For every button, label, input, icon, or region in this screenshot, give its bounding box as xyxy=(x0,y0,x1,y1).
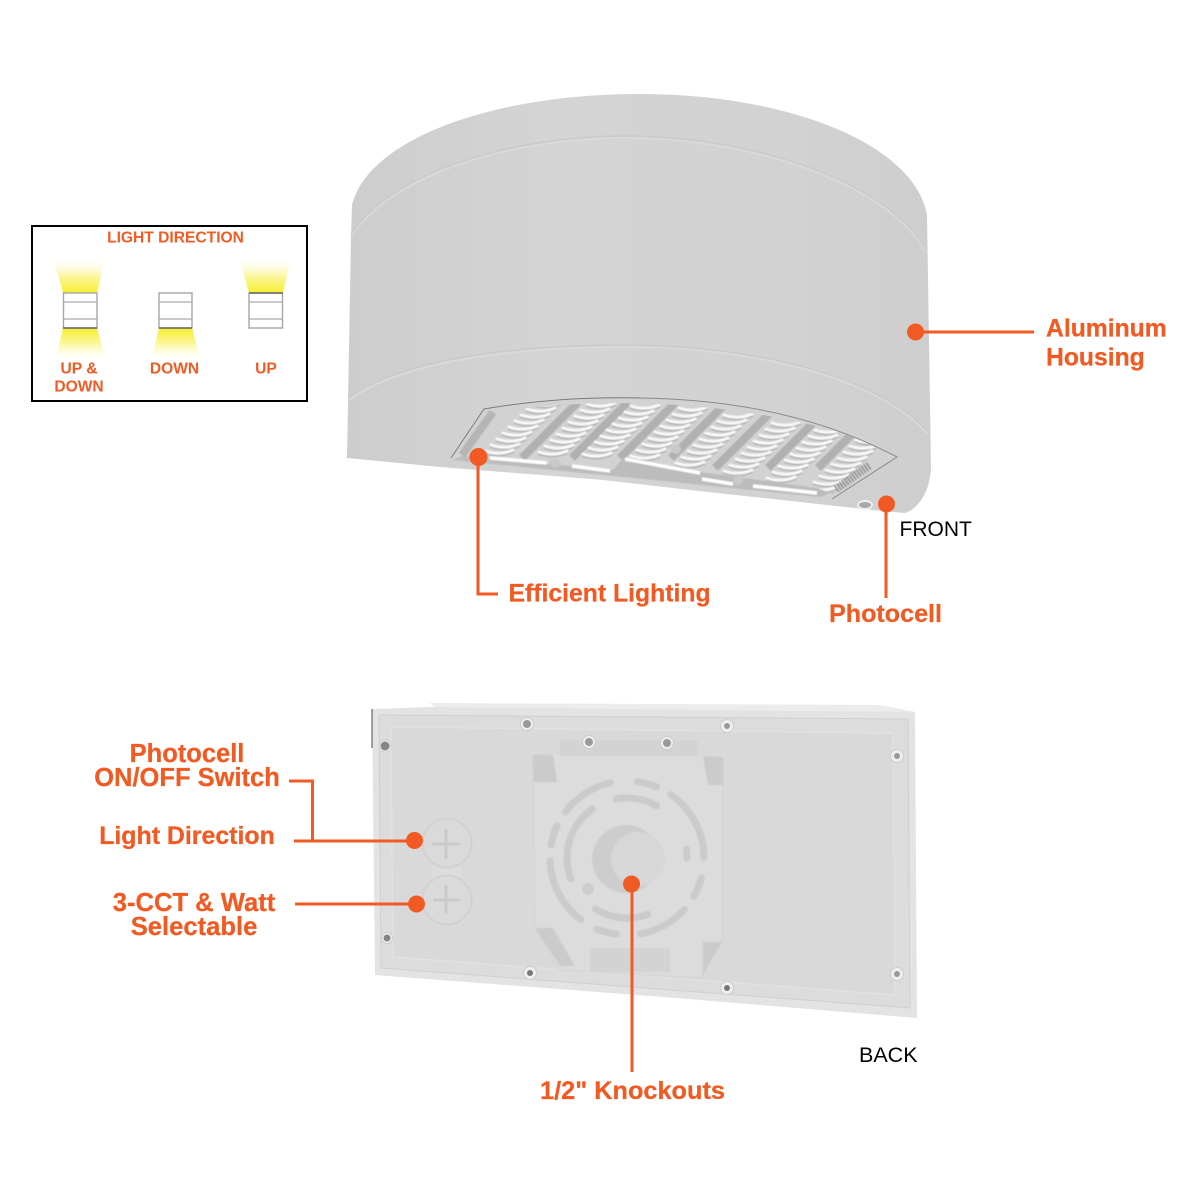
light direction panel xyxy=(32,226,307,401)
callout: photocell on/off switch: ON/OFF Switch xyxy=(94,764,280,792)
front view of wall light xyxy=(347,94,931,513)
callout: aluminum housing: Aluminum xyxy=(1046,316,1167,342)
callout: knockouts xyxy=(540,876,725,1105)
upper groove xyxy=(351,136,926,252)
selector switch cover: light direction xyxy=(422,818,472,880)
callout: light direction: Light Direction xyxy=(99,822,275,850)
callout: knockouts: 1/2" Knockouts xyxy=(540,1077,725,1105)
mounting bracket xyxy=(533,740,723,978)
back view of wall light xyxy=(372,703,917,1018)
label: back: BACK xyxy=(859,1043,918,1067)
lens bottom reflector bars xyxy=(452,412,870,497)
photocell sensor xyxy=(858,501,872,509)
callout: photocell xyxy=(829,496,942,628)
plate inset panel xyxy=(379,715,910,1008)
LED lens array xyxy=(450,398,898,499)
lower groove xyxy=(349,345,928,434)
outer ring slots xyxy=(550,781,704,935)
callout: light direction xyxy=(99,822,423,850)
icon: down light xyxy=(151,293,201,362)
panel title: LIGHT DIRECTION xyxy=(107,230,244,246)
callout: 3-CCT and watt selectable: Selectable xyxy=(131,913,257,941)
callout: 3-CCT and watt selectable: 3-CCT & Watt xyxy=(113,889,275,917)
label: down: DOWN xyxy=(150,360,199,378)
icon: up light xyxy=(239,257,291,328)
label: up and down: DOWN xyxy=(54,378,104,396)
label: front: FRONT xyxy=(900,518,972,541)
callout: efficient lighting xyxy=(470,448,711,608)
callout: photocell: Photocell xyxy=(829,600,942,628)
housing body xyxy=(347,94,931,513)
callout: efficient lighting: Efficient Lighting xyxy=(508,580,711,608)
callout: photocell on/off switch xyxy=(94,740,312,841)
icon: up and down light xyxy=(53,257,106,362)
center knockout hole xyxy=(592,825,660,893)
callout: photocell on/off switch: Photocell xyxy=(130,740,244,768)
callout: aluminum housing xyxy=(907,316,1167,372)
inner ring slots xyxy=(567,798,687,918)
callout: aluminum housing: Housing xyxy=(1046,344,1145,372)
back housing edge xyxy=(430,703,916,712)
screws xyxy=(379,718,904,994)
label: up: UP xyxy=(255,360,277,378)
selector switch cover: CCT and watt xyxy=(422,876,472,924)
back plate xyxy=(372,707,917,1018)
label: up and down: UP & xyxy=(61,360,97,378)
callout: 3-CCT and watt selectable xyxy=(113,889,425,941)
